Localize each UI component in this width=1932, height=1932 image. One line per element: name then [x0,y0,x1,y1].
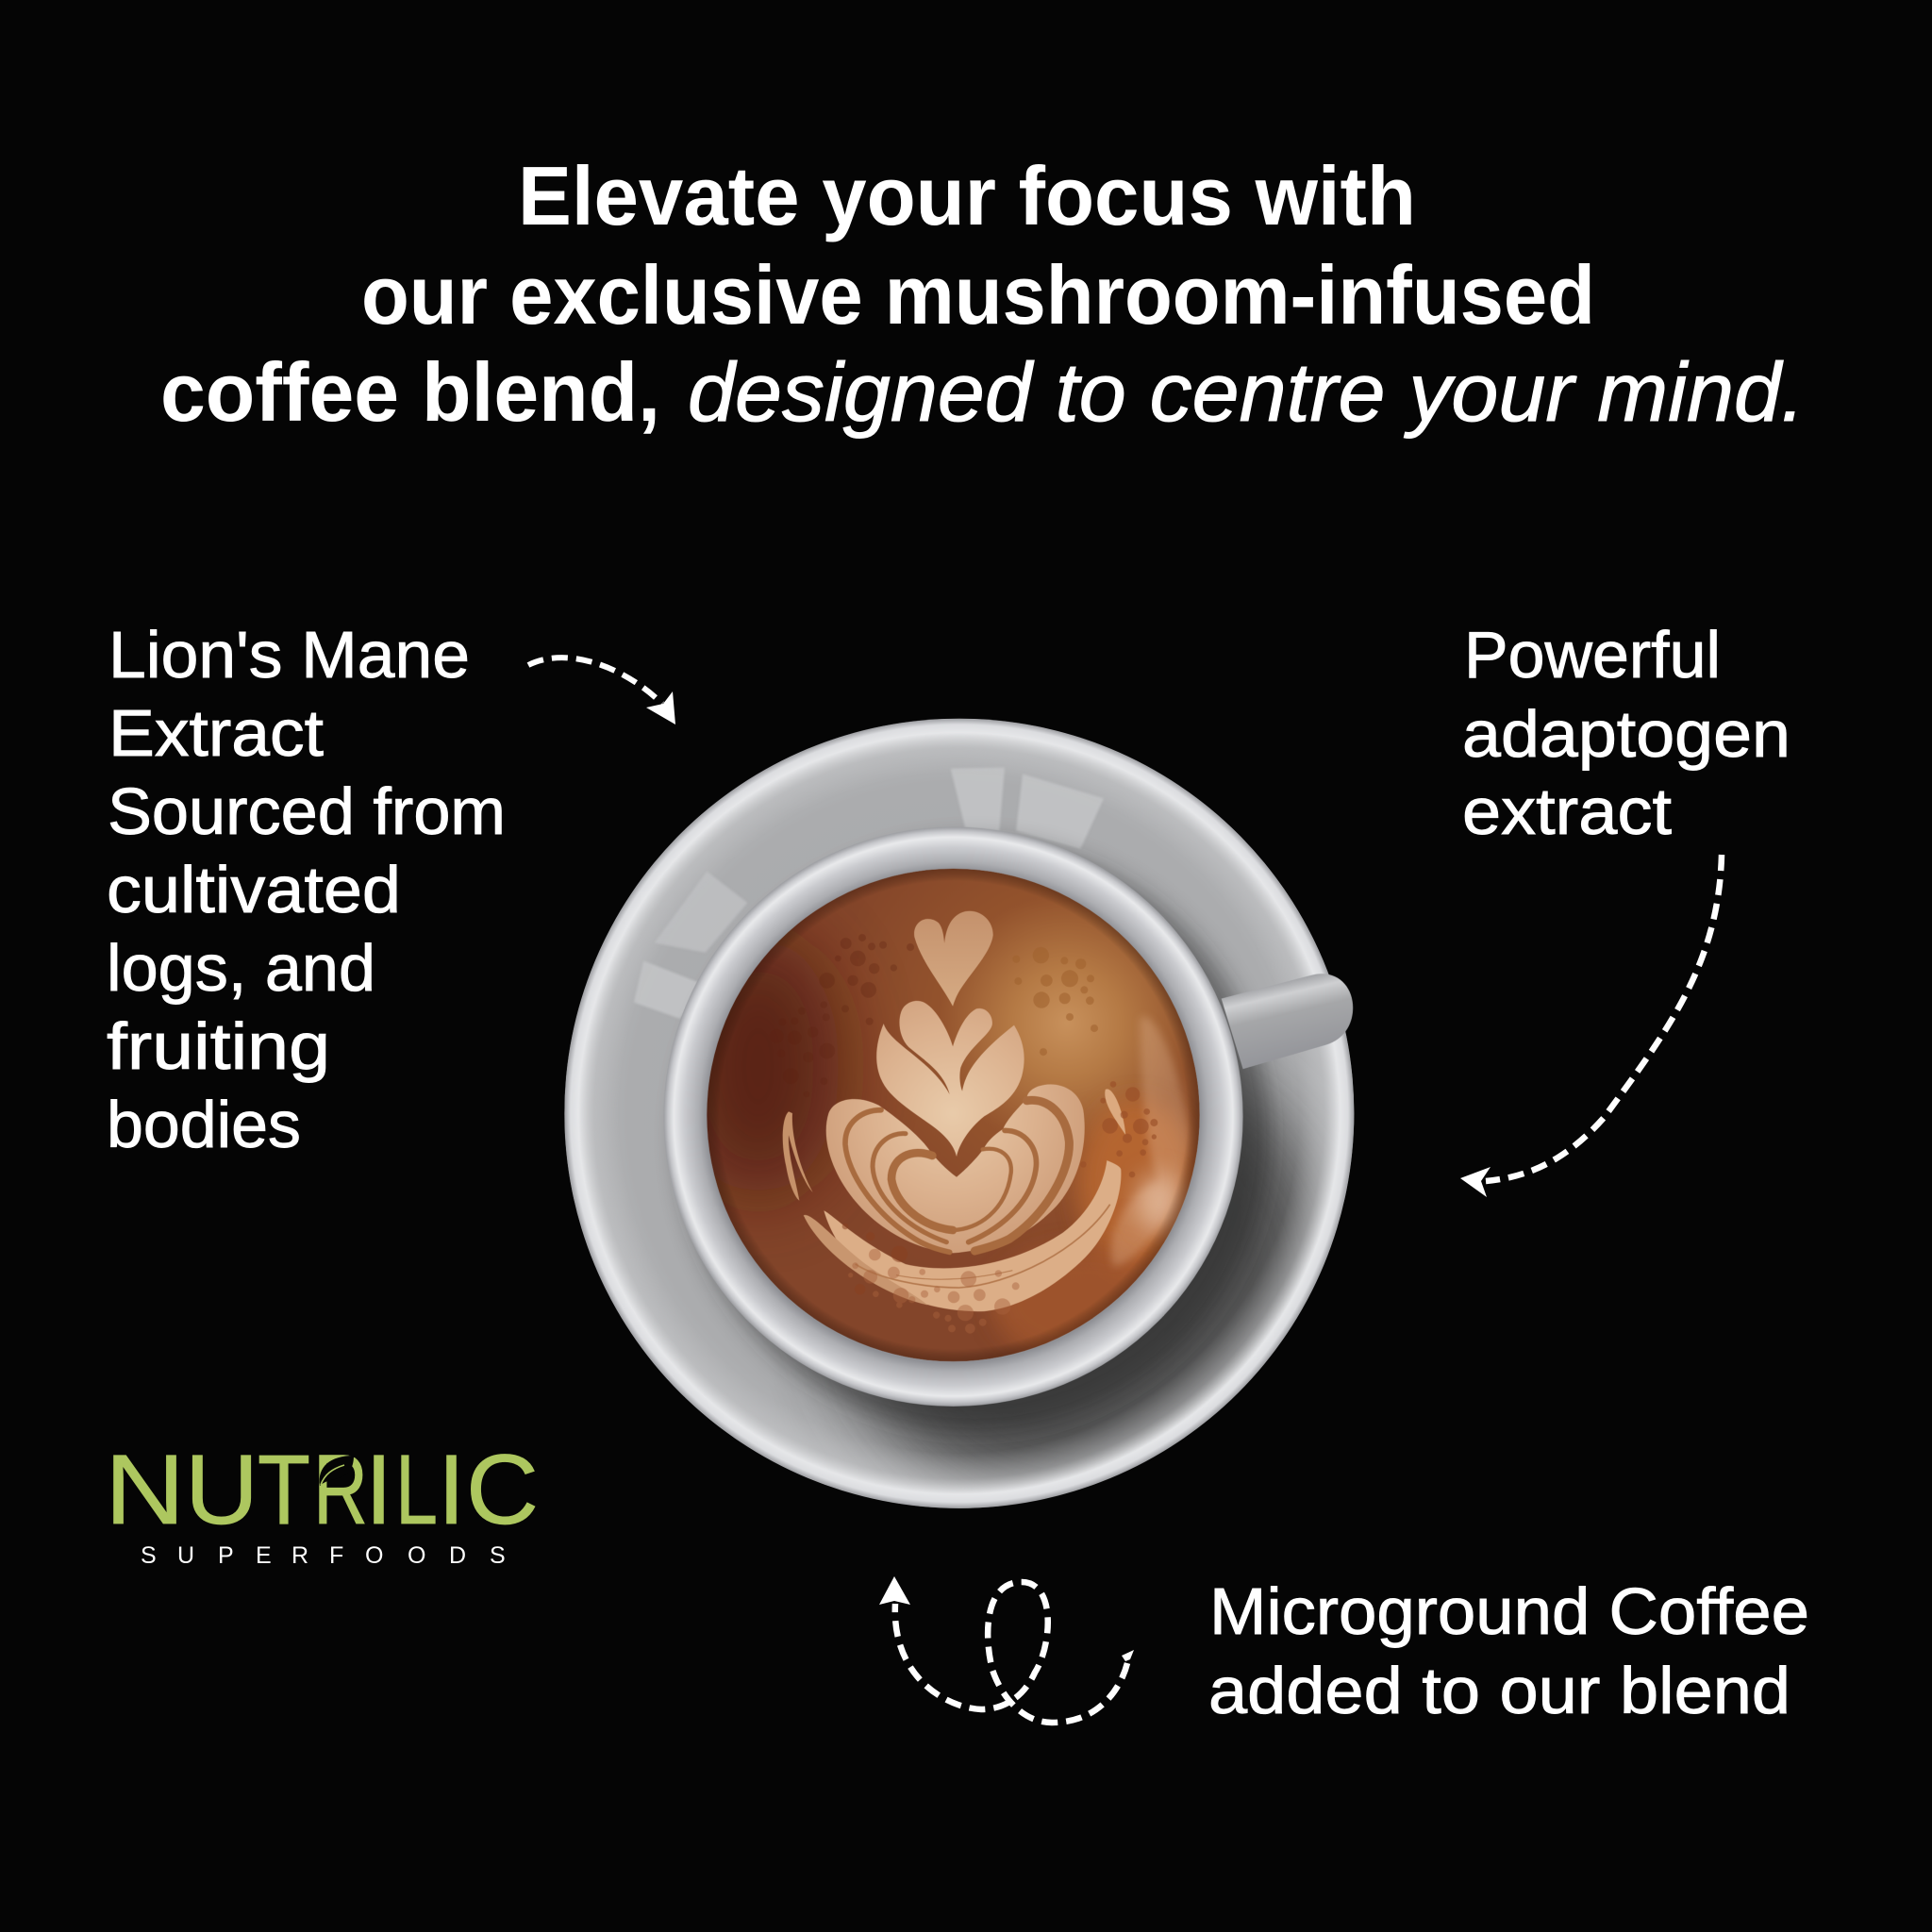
title: designed to centre your mind. [688,345,1805,439]
saucer rim highlight [564,719,1354,1508]
warm lower right tone [989,1249,1141,1350]
arrow: Lion's Mane to cup [528,658,675,724]
logo: Nutrilic Superfoods: SUPERFOODS [141,1542,506,1569]
logo: Nutrilic Superfoods: U [185,1435,258,1545]
latte art: tulip and heart [876,1001,1024,1157]
saucer [564,719,1354,1521]
warm glow in coffee [1078,1099,1197,1272]
latte art [770,911,1158,1334]
bubbles right cluster [1012,947,1098,1056]
text block: Lion's Mane extract [107,618,506,1161]
text block: Powerful adaptogen extract: extract [1462,774,1672,848]
logo: Nutrilic Superfoods: L [395,1435,438,1545]
text block: Lion's Mane extract: logs, and [107,931,375,1005]
text block: Lion's Mane extract: Extract [108,696,324,770]
logo: Nutrilic Superfoods: N [105,1435,185,1545]
title: coffee blend, [160,345,660,439]
text block: Powerful adaptogen extract: adaptogen [1462,697,1790,771]
latte art: top heart [914,911,993,1007]
latte art: lower swoosh [824,1160,1121,1311]
coffee edge shading [707,869,1200,1361]
icon: leaf in logo R [320,1456,354,1486]
logo: Nutrilic Superfoods: I [438,1435,465,1545]
coffee surface [677,869,1200,1364]
latte art: outer swoosh [804,1215,927,1305]
bubbles bottom cluster [848,1249,1020,1334]
glare highlight [1111,1016,1189,1267]
text block: Lion's Mane extract: bodies [107,1088,301,1161]
logo: Nutrilic Superfoods [105,1435,539,1569]
title: our exclusive mushroom-infused [361,248,1595,341]
text block: Lion's Mane extract: cultivated [107,853,401,926]
title [160,149,1805,439]
bubbles orange cluster [1080,1081,1158,1177]
title: Elevate your focus with [518,149,1416,242]
latte art: rosetta body [826,1084,1085,1253]
bubbles dark cluster [770,934,914,1097]
latte art: left small swoosh [783,1111,813,1201]
window reflections on saucer [634,767,1104,1019]
text block: Microground Coffee: added to our blend [1208,1654,1790,1727]
bubbles darker bottom [842,1224,908,1294]
text block: Microground Coffee [1208,1574,1809,1727]
cup rim [663,827,1243,1407]
dark shadow in coffee [677,937,840,1196]
cup handle [1222,974,1353,1069]
text block: Lion's Mane extract: Lion's Mane [108,618,470,691]
text block: Microground Coffee: Microground Coffee [1209,1574,1809,1648]
logo: Nutrilic Superfoods: C [466,1435,539,1545]
arrow: looping microground to cup [879,1576,1134,1723]
text block: Powerful adaptogen extract: Powerful [1464,618,1721,691]
cup shadow on saucer [680,841,1343,1521]
logo: Nutrilic Superfoods: R [313,1435,368,1545]
logo: Nutrilic Superfoods: T [258,1435,310,1545]
text block: Lion's Mane extract: fruiting [107,1009,330,1083]
logo: Nutrilic Superfoods: I [365,1435,392,1545]
arrow: adaptogen to cup [1460,855,1722,1197]
latte art: rosetta contour lines [845,1100,1069,1252]
text block: Powerful adaptogen extract [1462,618,1790,848]
coffee cup illustration [564,719,1354,1521]
latte art: swoosh lines [856,1205,1110,1288]
text block: Lion's Mane extract: Sourced from [108,774,506,848]
latte art: right small swoosh [1105,1089,1125,1135]
